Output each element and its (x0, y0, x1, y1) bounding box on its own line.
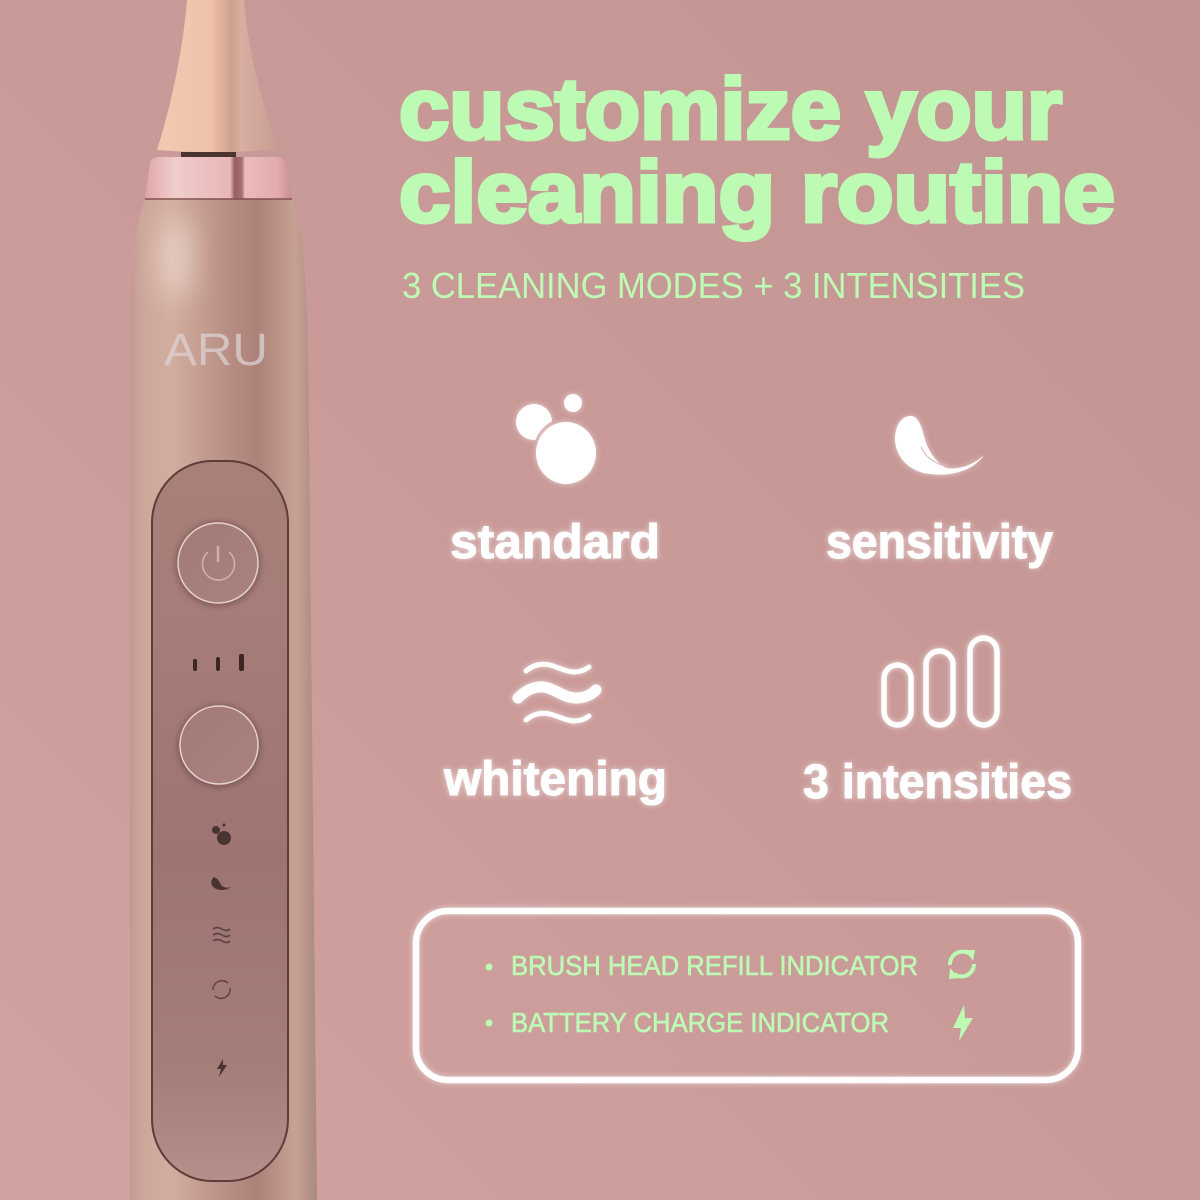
title (399, 62, 1115, 240)
brush head (157, 0, 277, 152)
icon: lightning bolt (953, 1005, 973, 1041)
power symbol (202, 546, 234, 580)
icon: standard bubbles (516, 394, 596, 484)
icon: refill arrows (949, 950, 975, 979)
intensity LEDs (193, 654, 244, 671)
neck gap (181, 152, 236, 157)
panel icon: bolt (217, 1059, 227, 1077)
handle seam (145, 198, 292, 200)
bullet 2 (486, 1020, 492, 1026)
indicator box (416, 911, 1078, 1080)
panel icon: waves (213, 928, 230, 942)
handle (130, 199, 317, 1200)
label: sensitivity: sensitivity (826, 516, 1053, 569)
metal ring (145, 157, 292, 199)
power button (175, 521, 261, 607)
label: standard: standard (450, 516, 660, 569)
title: customize your (399, 62, 1062, 158)
panel icon: feather (211, 877, 231, 890)
icon: sensitivity feather (895, 416, 984, 475)
label: whitening: whitening (443, 753, 667, 806)
toothbrush (130, 0, 317, 1200)
mode button (177, 704, 261, 788)
panel icon: bubbles (212, 824, 231, 845)
indicator text: brush head refill: BRUSH HEAD REFILL INDICATOR (511, 950, 918, 981)
box outline (416, 911, 1078, 1080)
subtitle: 3 CLEANING MODES + 3 INTENSITIES (402, 265, 1025, 306)
indicator text: battery charge: BATTERY CHARGE INDICATOR (511, 1007, 889, 1038)
handle highlight (160, 216, 192, 300)
icon: whitening waves (518, 664, 596, 721)
label: 3 intensities: 3 intensities (803, 756, 1072, 809)
ARU logo: ARU (164, 324, 268, 375)
icon: 3 intensities pills (884, 638, 997, 725)
control panel (152, 461, 288, 1181)
feather slit (921, 447, 948, 467)
title: cleaning routine (399, 144, 1115, 240)
bullet 1 (486, 964, 492, 970)
panel icon: refill (213, 981, 230, 998)
